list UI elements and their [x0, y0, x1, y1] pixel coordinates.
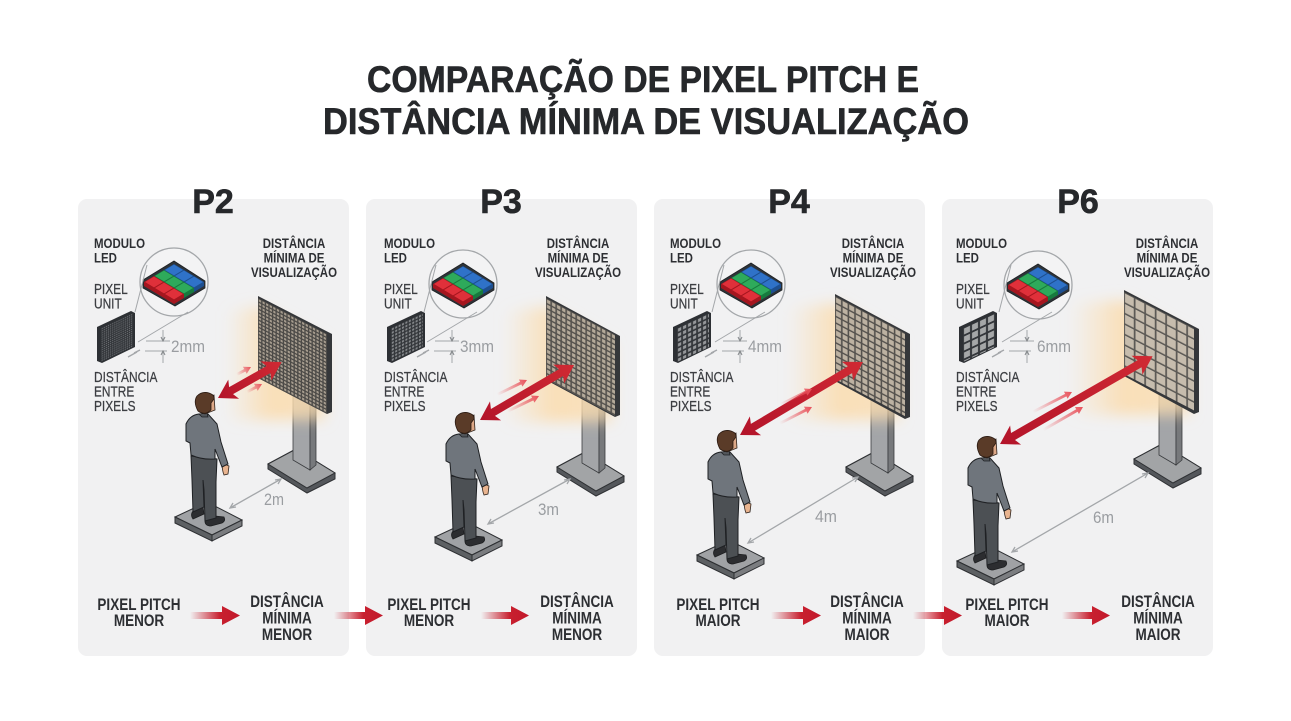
floor distance [1012, 473, 1148, 552]
LED screen [1124, 290, 1199, 414]
label: distancia entre pixels: PIXELS [384, 398, 426, 414]
icon: LED module [959, 311, 997, 363]
viewing arrow [734, 353, 869, 444]
summary: pixel pitch: PIXEL PITCH [965, 596, 1049, 614]
label: pixel unit: UNIT [94, 295, 122, 312]
arrow: P4 to P6 [913, 606, 962, 625]
label: pixel unit: PIXEL [956, 281, 990, 297]
label: distancia entre pixels: DISTÂNCIA [956, 369, 1019, 385]
small arrows [778, 385, 814, 427]
summary: distancia: MAIOR [1135, 626, 1181, 644]
label: modulo led: MODULO [670, 235, 721, 251]
stand [1134, 390, 1201, 488]
viewing arrow [474, 356, 580, 429]
label: distancia minima: MÍNIMA DE [548, 249, 609, 266]
floor distance: 3m [538, 500, 559, 519]
person [435, 412, 502, 561]
label: distancia entre pixels: DISTÂNCIA [94, 369, 157, 385]
label: distancia minima: DISTÂNCIA [1136, 235, 1198, 251]
pixel distance measure [417, 265, 494, 363]
LED screen [835, 294, 910, 419]
pixel distance measure: 3mm [460, 337, 494, 356]
label: distancia entre pixels: ENTRE [670, 383, 710, 400]
label: pixel unit: PIXEL [384, 281, 418, 297]
summary: pixel pitch: MENOR [114, 612, 164, 630]
heading: P6: P6 [1057, 183, 1099, 221]
label: pixel unit: UNIT [956, 295, 984, 312]
pixel distance measure [705, 265, 782, 363]
small arrows [496, 376, 541, 415]
icon: pixel unit magnified [1004, 251, 1072, 319]
label: distancia minima: DISTÂNCIA [547, 235, 609, 251]
icon: pixel unit magnified [717, 250, 785, 318]
label: modulo led: LED [956, 249, 979, 266]
pixel distance measure: 2mm [171, 337, 205, 356]
small arrows [1031, 388, 1085, 433]
stand [557, 398, 624, 496]
person [957, 436, 1024, 585]
summary: distancia: DISTÂNCIA [830, 593, 904, 611]
icon: pixel unit magnified [429, 250, 497, 318]
label: pixel unit: PIXEL [670, 281, 704, 297]
summary: pixel pitch: PIXEL PITCH [676, 596, 760, 614]
label: distancia minima: VISUALIZAÇÃO [830, 264, 916, 280]
summary: distancia: DISTÂNCIA [540, 593, 614, 611]
summary arrow [481, 606, 529, 625]
pixel distance measure [992, 265, 1071, 363]
label: distancia minima: MÍNIMA DE [264, 249, 325, 266]
label: distancia entre pixels: DISTÂNCIA [384, 369, 447, 385]
floor distance: 6m [1093, 508, 1114, 527]
label: modulo led: MODULO [384, 235, 435, 251]
summary: pixel pitch: PIXEL PITCH [387, 596, 471, 614]
panel: P6 [942, 183, 1213, 656]
label: pixel unit: UNIT [384, 295, 412, 312]
label: distancia entre pixels: PIXELS [956, 398, 998, 414]
pixel distance measure [128, 265, 205, 363]
summary: pixel pitch: PIXEL PITCH [97, 596, 181, 614]
label: distancia entre pixels: ENTRE [384, 383, 424, 400]
summary arrow [190, 606, 240, 625]
label: distancia entre pixels: ENTRE [956, 383, 996, 400]
person [697, 430, 764, 579]
summary: distancia: MÍNIMA [552, 609, 602, 628]
summary: distancia: MAIOR [844, 626, 890, 644]
icon: LED module [97, 311, 135, 363]
summary: pixel pitch: MAIOR [695, 612, 741, 630]
label: distancia minima: MÍNIMA DE [843, 249, 904, 266]
label: distancia minima: MÍNIMA DE [1137, 249, 1198, 266]
stand [846, 398, 913, 496]
label: distancia entre pixels: PIXELS [670, 398, 712, 414]
label: pixel unit: PIXEL [94, 281, 128, 297]
title [323, 58, 969, 142]
pixel distance measure: 6mm [1037, 337, 1071, 356]
glow [504, 306, 612, 422]
panel: P3 [366, 183, 637, 656]
summary: distancia: MÍNIMA [1133, 609, 1183, 628]
panel: P4 [654, 183, 925, 656]
label: distancia minima: DISTÂNCIA [263, 235, 325, 251]
heading: P4: P4 [768, 183, 810, 221]
LED screen [546, 296, 620, 417]
summary arrow [1062, 606, 1110, 625]
label: pixel unit: UNIT [670, 295, 698, 312]
label: distancia minima: VISUALIZAÇÃO [251, 264, 337, 280]
summary: distancia: MENOR [262, 626, 312, 644]
label: distancia minima: DISTÂNCIA [842, 235, 904, 251]
label: distancia entre pixels: PIXELS [94, 398, 136, 414]
viewing arrow [213, 353, 287, 408]
stand [268, 395, 335, 493]
summary: distancia: DISTÂNCIA [250, 593, 324, 611]
floor distance [230, 479, 284, 509]
label: modulo led: MODULO [94, 235, 145, 251]
icon: LED module [673, 311, 711, 363]
small arrows [235, 363, 264, 396]
LED screen [258, 296, 332, 414]
summary: distancia: MÍNIMA [262, 609, 312, 628]
glow [226, 306, 325, 420]
panel: P2 [78, 183, 349, 656]
icon: LED module [387, 311, 425, 363]
viewing arrow [995, 347, 1158, 454]
summary: pixel pitch: MENOR [404, 612, 454, 630]
heading: P2: P2 [192, 183, 234, 221]
summary: distancia: DISTÂNCIA [1121, 593, 1195, 611]
summary: distancia: MENOR [552, 626, 602, 644]
label: modulo led: LED [94, 249, 117, 266]
floor distance [488, 479, 570, 524]
label: modulo led: LED [670, 249, 693, 266]
title: COMPARAÇÃO DE PIXEL PITCH E [367, 58, 919, 100]
label: modulo led: MODULO [956, 235, 1007, 251]
floor distance: 4m [815, 507, 837, 526]
glow [1070, 300, 1190, 415]
label: distancia entre pixels: ENTRE [94, 383, 134, 400]
label: distancia minima: VISUALIZAÇÃO [1124, 264, 1210, 280]
pixel distance measure: 4mm [748, 337, 782, 356]
floor distance: 2m [264, 490, 284, 509]
person [175, 392, 242, 541]
summary arrow [771, 606, 821, 625]
label: distancia entre pixels: DISTÂNCIA [670, 369, 733, 385]
floor distance [748, 477, 858, 543]
glow [788, 303, 900, 420]
title: DISTÂNCIA MÍNIMA DE VISUALIZAÇÃO [323, 100, 969, 142]
label: distancia minima: VISUALIZAÇÃO [535, 264, 621, 280]
icon: pixel unit magnified [140, 248, 208, 316]
summary: pixel pitch: MAIOR [984, 612, 1030, 630]
arrow: P2 to P3 [334, 606, 383, 625]
heading: P3: P3 [480, 183, 522, 221]
label: modulo led: LED [384, 249, 407, 266]
summary: distancia: MÍNIMA [842, 609, 892, 628]
